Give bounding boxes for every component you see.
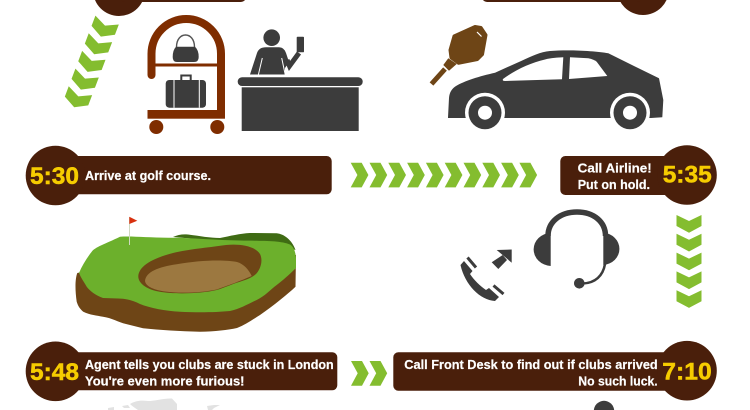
timeline bar: top right (cut off) [482, 0, 669, 15]
timeline bar: 5:30 arrive at golf course [26, 146, 332, 205]
handbag [173, 35, 199, 62]
bunker sand [145, 260, 252, 293]
front wheel [465, 93, 505, 134]
arrow: horizontal green chevrons [351, 163, 537, 187]
held card [297, 37, 304, 52]
timeline bar: 5:35 call airline: Call Airline! [578, 161, 652, 175]
cart base and wheels [148, 110, 225, 134]
desk body [242, 87, 359, 131]
icon: headset [534, 212, 619, 289]
timeline bar: 7:10 call front desk [393, 341, 717, 401]
timeline bar: 5:48 agent update: You're even more furious! [85, 375, 244, 389]
receptionist head [263, 29, 280, 46]
cart frame [152, 19, 221, 112]
timeline bar: 5:35 call airline [560, 145, 717, 205]
timeline bar: 5:35 call airline: 5:35 [663, 162, 712, 189]
flag [129, 217, 137, 245]
icon: golf bunker island [75, 217, 296, 332]
earth layer [75, 250, 296, 332]
icon: telephone handset [460, 258, 504, 301]
timeline bar: 5:30 arrive at golf course: 5:30 [30, 163, 79, 190]
suitcase [166, 76, 206, 108]
bunker rim [138, 245, 261, 293]
receptionist body [250, 47, 299, 75]
icon: car key [432, 26, 486, 84]
timeline bar: 7:10 call front desk: No such luck. [578, 375, 658, 389]
rear wheel [610, 93, 650, 134]
fairway [79, 237, 296, 312]
timeline bar: top left (cut off) [93, 0, 246, 16]
car body [448, 50, 663, 118]
arrow: short green chevrons [351, 361, 387, 386]
desk top [238, 77, 363, 86]
icon: car [448, 50, 663, 134]
timeline bar: 5:48 agent update: 5:48 [30, 359, 79, 386]
world map (cut off) [108, 398, 220, 410]
timeline bar: 5:48 agent update [26, 342, 337, 401]
timeline bar: 5:35 call airline: Put on hold. [578, 178, 650, 192]
arrow: vertical green chevrons [676, 215, 702, 308]
timeline bar: 5:48 agent update: Agent tells you clubs are stuck in London [85, 358, 334, 372]
arrow: dark call arrow [492, 250, 512, 269]
icon: front desk with receptionist [238, 29, 363, 131]
timeline bar: 7:10 call front desk: 7:10 [662, 358, 712, 385]
car windows [503, 57, 607, 81]
icon: luggage cart [148, 19, 225, 134]
timeline bar: 5:30 arrive at golf course: Arrive at golf course. [85, 169, 211, 183]
icon: person head (cut off) [594, 401, 614, 410]
arrow: slanted green chevrons [62, 16, 119, 112]
timeline bar: 7:10 call front desk: Call Front Desk to find out if clubs arrived [404, 358, 658, 372]
dark green back edge [173, 233, 296, 250]
